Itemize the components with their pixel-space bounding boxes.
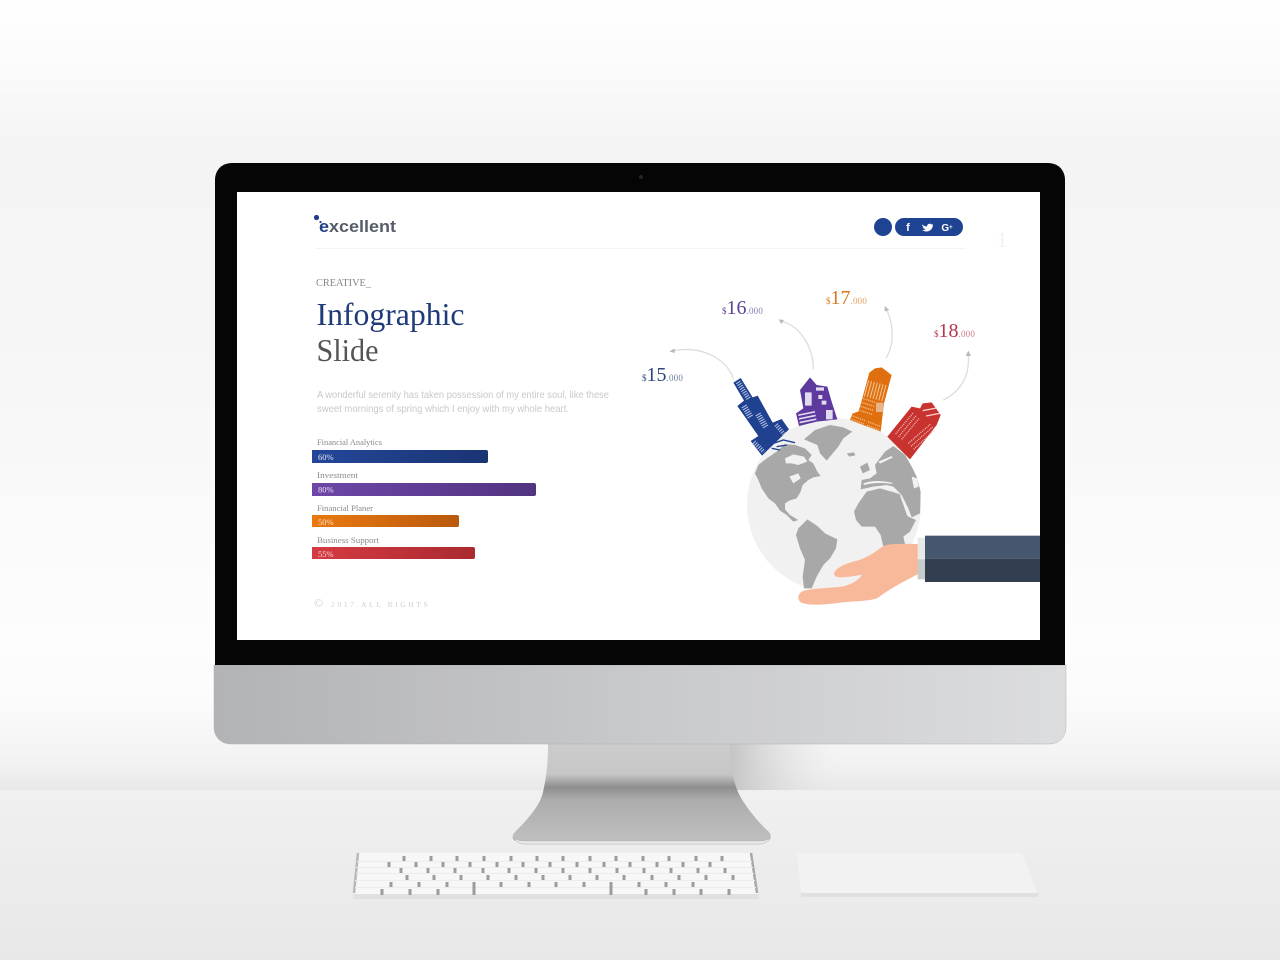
- body text: A wonderful serenity has taken possession of my entire soul, like these: [317, 389, 609, 401]
- buildings and arrows: [669, 306, 971, 459]
- continent details: [785, 454, 919, 516]
- trackpad: [797, 853, 1038, 897]
- building: blue: [733, 378, 795, 456]
- bar chart: [312, 437, 536, 559]
- shirt cuff: [918, 538, 925, 579]
- social icons: G: [941, 223, 949, 234]
- eyebrow: CREATIVE_: [316, 277, 371, 289]
- bar: financial analytics: 60%: [318, 452, 334, 462]
- social icons: [874, 218, 963, 236]
- title: Infographic: [316, 296, 464, 332]
- logo: excellent: [319, 217, 396, 236]
- social icons: f: [906, 222, 910, 234]
- desk surface: [0, 790, 1280, 960]
- bar: investment: Investment: [317, 470, 359, 480]
- building: purple: [796, 377, 837, 426]
- jacket sleeve: [925, 536, 1040, 582]
- monitor bezel: [215, 163, 1065, 665]
- bar: business support: 55%: [318, 549, 334, 559]
- page number: 1: [996, 227, 1008, 252]
- screen: [237, 192, 1040, 640]
- hand: [798, 544, 918, 605]
- value: $17,000: $17.000: [826, 287, 867, 309]
- globe: [747, 418, 921, 592]
- monitor chin: [214, 665, 1066, 744]
- camera: [639, 175, 643, 179]
- monitor body: [214, 163, 1066, 744]
- bar: financial analytics: Financial Analytics: [317, 437, 382, 447]
- title: Slide: [316, 332, 378, 368]
- continents: [755, 425, 921, 588]
- building: orange: [850, 367, 892, 432]
- arrow heads: [669, 306, 971, 356]
- globe with hand: [747, 418, 1040, 605]
- value: $15,000: $15.000: [642, 364, 683, 386]
- body text: sweet mornings of spring which I enjoy with my whole heart.: [317, 403, 569, 415]
- title: [316, 296, 464, 368]
- key gaps: [382, 856, 733, 895]
- bar: business support: [312, 535, 475, 559]
- bar: investment: [312, 470, 536, 496]
- bar: investment: 80%: [318, 484, 334, 494]
- value: $16,000: $16.000: [722, 297, 763, 319]
- value: $18,000: $18.000: [934, 320, 975, 342]
- bar: financial analytics: [312, 437, 488, 463]
- header divider: [316, 248, 966, 249]
- bar: business support: Business Support: [317, 535, 380, 545]
- growth arrows: [673, 310, 969, 400]
- bar: financial planer: Financial Planer: [317, 503, 373, 513]
- bar: financial planer: 50%: [318, 517, 334, 527]
- bar: financial planer: [312, 503, 459, 527]
- social icons: +: [949, 225, 953, 231]
- building: red: [887, 402, 941, 459]
- monitor stand: [513, 744, 840, 844]
- body text: [317, 389, 609, 415]
- keyboard: [353, 853, 759, 899]
- copyright: ©2017.ALL RIGHTS: [314, 596, 430, 610]
